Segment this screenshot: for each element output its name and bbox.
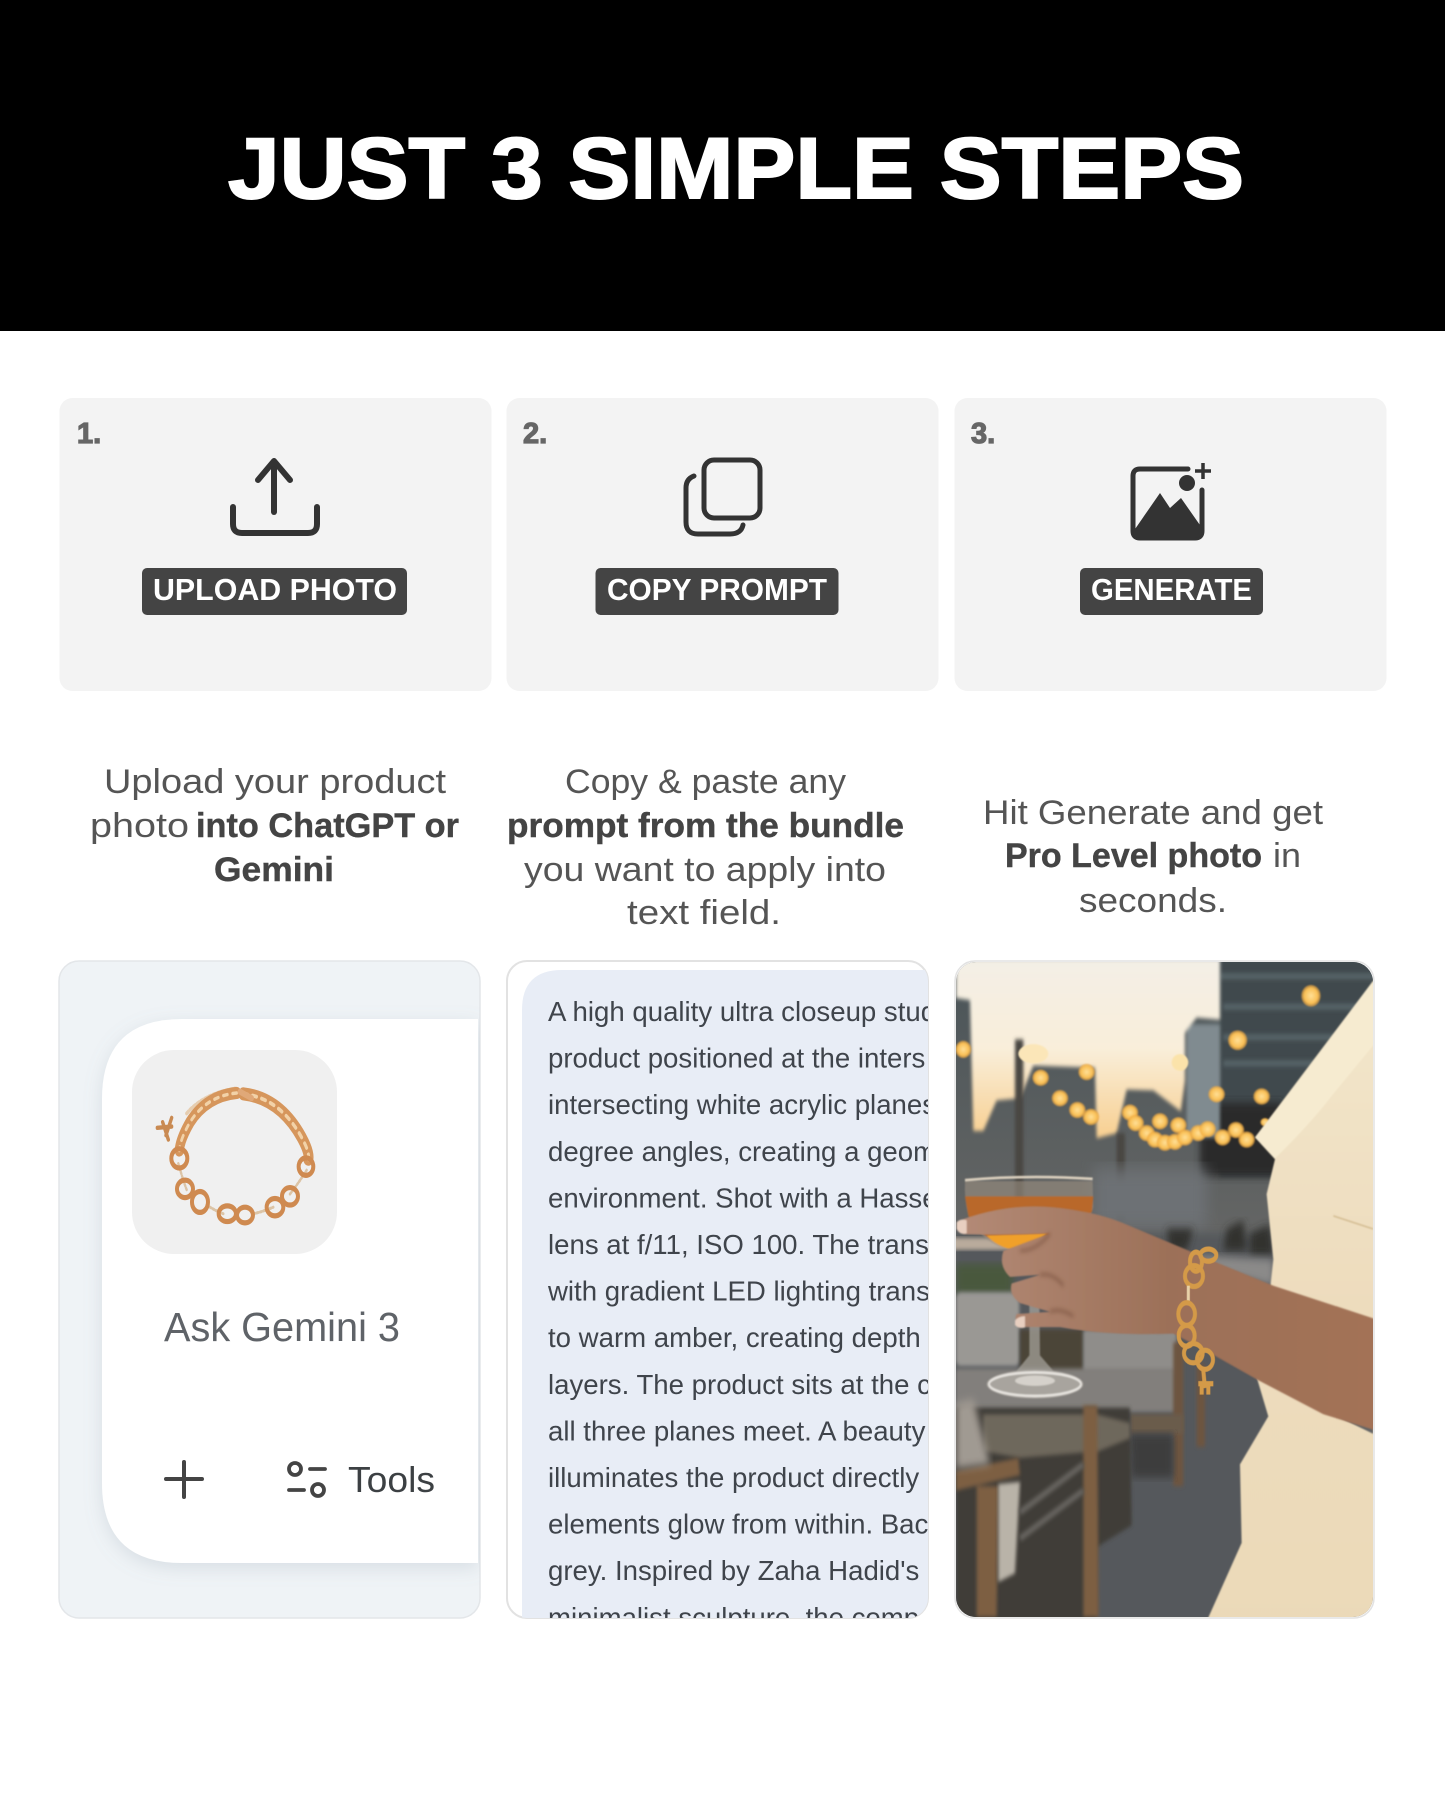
step number 1: 1. [77, 418, 101, 450]
text block: step 2 description: you want to apply into [524, 851, 886, 889]
prompt text: elements glow from within. Bacl [548, 1509, 934, 1540]
panel: step 2 copy prompt [506, 398, 938, 691]
prompt text: environment. Shot with a Hasse [548, 1182, 938, 1213]
step number 3: 3. [971, 418, 995, 450]
icon: copy [686, 460, 760, 534]
text block: step 3 description [983, 794, 1324, 920]
prompt text: A high quality ultra closeup stud [548, 996, 936, 1027]
rooftop furniture and floor [953, 1220, 1287, 1626]
string lights [955, 985, 1321, 1151]
icon: tools sliders [289, 1463, 325, 1496]
prompt text: layers. The product sits at the c [548, 1369, 931, 1400]
panel: gemini upload screenshot [59, 961, 480, 1618]
text block: step 2 description [507, 763, 904, 932]
dress [1207, 976, 1380, 1621]
prompt text: product positioned at the inters [548, 1043, 925, 1074]
header banner [0, 0, 1445, 331]
hand and arm [957, 1206, 1380, 1432]
text block: step 1 description: Gemini [214, 851, 334, 889]
text block: step 2 description: prompt from the bundle [507, 807, 904, 845]
text block: step 1 description: Upload your product [104, 763, 447, 801]
icon: plus [166, 1462, 202, 1497]
label: copy prompt: COPY PROMPT [607, 572, 827, 607]
label: generate [1080, 568, 1263, 615]
text block: step 1 description: into ChatGPT or [196, 807, 459, 845]
text block: step 3 description: seconds. [1079, 882, 1227, 920]
prompt text: degree angles, creating a geom [548, 1136, 936, 1167]
prompt text: lens at f/11, ISO 100. The translu [548, 1229, 950, 1260]
photo sky [956, 959, 1220, 1138]
panel: step 3 generate [954, 398, 1386, 691]
prompt text: minimalist sculpture, the comp [548, 1602, 919, 1633]
photo background city [953, 959, 1380, 1626]
icon: upload [233, 461, 317, 533]
prompt bubble [522, 970, 928, 1620]
placeholder: ask gemini: Ask Gemini 3 [164, 1304, 400, 1350]
label: generate: GENERATE [1091, 572, 1252, 607]
text block: step 3 description: Pro Level photo [1005, 837, 1262, 875]
label: upload photo: UPLOAD PHOTO [153, 572, 397, 607]
title: JUST 3 SIMPLE STEPS [228, 121, 1244, 217]
product thumbnail [132, 1050, 337, 1254]
text block: step 2 description: Copy & paste any [565, 763, 846, 801]
prompt text: intersecting white acrylic planes [548, 1089, 936, 1120]
text block: step 1 description [90, 763, 459, 889]
text block: step 3 description: Hit Generate and get [983, 794, 1324, 832]
prompt text: grey. Inspired by Zaha Hadid's a [548, 1555, 943, 1586]
prompt text [547, 996, 950, 1633]
label: tools: Tools [348, 1459, 435, 1500]
text block: step 2 description: text field. [627, 894, 781, 932]
prompt text: to warm amber, creating depth [548, 1322, 921, 1353]
panel: generated photo [953, 959, 1380, 1626]
prompt text: illuminates the product directly [548, 1462, 919, 1493]
text block: step 3 description: in [1273, 837, 1301, 875]
panel: step 1 upload photo [60, 398, 492, 691]
prompt text: with gradient LED lighting trans [547, 1276, 930, 1307]
gemini input card [102, 1019, 478, 1563]
text block: step 1 description: photo [90, 807, 189, 845]
panel: prompt text screenshot [507, 961, 950, 1633]
prompt text: all three planes meet. A beauty [548, 1415, 926, 1446]
bracelet [157, 1089, 313, 1223]
icon: image with plus [1133, 463, 1211, 538]
step number 2: 2. [523, 418, 547, 450]
wine glass [965, 1177, 1093, 1399]
gold bracelet on wrist [1178, 1249, 1216, 1395]
